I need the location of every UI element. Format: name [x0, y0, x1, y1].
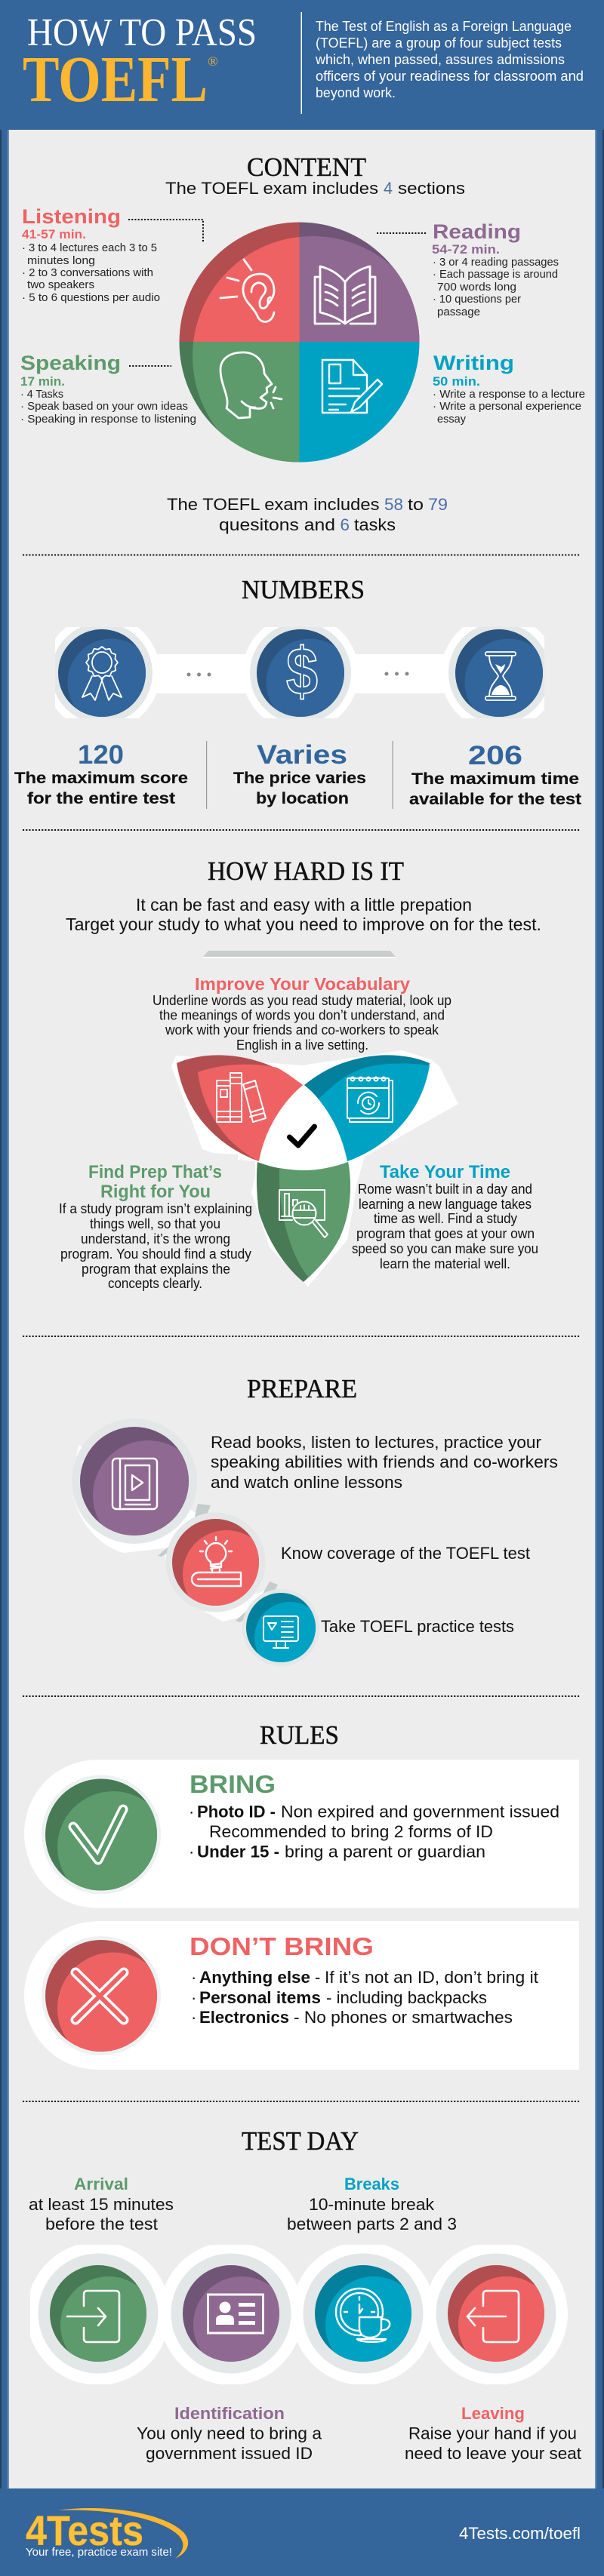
venn diagram — [171, 1050, 458, 1286]
text: breaks — [287, 2175, 457, 2233]
callout: reading: passage — [437, 306, 480, 318]
stat: varies: The price varies — [233, 770, 366, 787]
callout: listening: Listening — [22, 205, 121, 228]
callout: listening: 41-57 min. — [22, 227, 86, 241]
heading: prepare: PREPARE — [247, 1374, 357, 1403]
logo: 4Tests: 4Tests — [26, 2507, 143, 2554]
text: leaving — [405, 2404, 581, 2463]
header divider — [300, 12, 302, 114]
callout: speaking: 17 min. — [20, 374, 65, 389]
pie chart: four sections — [180, 222, 420, 462]
intro text: beyond work. — [316, 85, 396, 100]
callout: listening — [22, 205, 203, 304]
card: bring: BRING — [190, 1770, 276, 1798]
text: improve your vocabulary — [153, 974, 451, 1053]
text: improve your vocabulary: English in a live setting. — [236, 1037, 368, 1053]
icon: document with pencil — [322, 360, 382, 413]
text: find prep: Right for You — [100, 1182, 211, 1202]
text: know coverage: Know coverage of the TOEFL test — [281, 1544, 530, 1563]
text: improve your vocabulary: the meanings of words you don’t understand, and — [159, 1008, 445, 1023]
icon: monitor checklist — [246, 1593, 316, 1662]
text: identification: government issued ID — [146, 2444, 313, 2463]
icon: dollar — [257, 629, 344, 717]
heading: content: CONTENT — [247, 152, 366, 182]
panel: test day — [26, 2126, 581, 2463]
card: don't bring: · — [191, 1968, 196, 1987]
callout: reading — [377, 220, 559, 318]
text: breaks: 10-minute break — [309, 2195, 435, 2214]
text: read books: and watch online lessons — [211, 1473, 402, 1492]
venn: green leaf — [257, 1162, 350, 1282]
callout: speaking — [20, 352, 196, 426]
text: arrival: at least 15 minutes — [29, 2195, 174, 2214]
callout: writing: essay — [437, 413, 467, 426]
text: identification: You only need to bring a — [137, 2424, 322, 2443]
card: don't bring: Electronics — [199, 2008, 289, 2027]
card: don't bring: If it’s not an ID, don’t bring it — [325, 1968, 538, 1987]
text: take your time: learn the material well. — [380, 1256, 510, 1271]
intro lines: It can be fast and easy with a little prepation — [136, 895, 472, 915]
summary text: to — [408, 495, 424, 514]
intro text: officers of your readiness for classroom and — [316, 69, 584, 84]
icon: door leaving — [448, 2265, 544, 2362]
icon: id card — [183, 2265, 279, 2362]
text: breaks: between parts 2 and 3 — [287, 2215, 457, 2233]
venn: center check — [259, 1085, 347, 1170]
text: take your time — [352, 1162, 538, 1271]
text: arrival: before the test — [45, 2215, 158, 2233]
text: take your time: learning a new language takes — [359, 1197, 532, 1212]
callout: writing: · Write a response to a lecture — [433, 389, 585, 401]
subheading: sections: sections — [398, 179, 465, 198]
heading: how hard is it: HOW HARD IS IT — [208, 856, 404, 886]
stat: varies: by location — [256, 790, 349, 807]
stat: 206: 206 — [468, 741, 522, 770]
stat: 206 — [409, 741, 581, 808]
stat: 120: The maximum score — [14, 770, 188, 787]
callout: speaking: · Speak based on your own ideas — [20, 401, 188, 413]
card: bring: Recommended to bring 2 forms of ID — [209, 1822, 493, 1841]
text: practice tests: Take TOEFL practice tests — [321, 1617, 514, 1636]
callout: writing — [433, 352, 585, 426]
text: take your time: Rome wasn’t built in a day and — [358, 1182, 532, 1197]
card: don't bring: Anything else — [199, 1968, 310, 1987]
callout: speaking: Speaking — [20, 352, 121, 374]
card: bring: bring a parent or guardian — [285, 1843, 485, 1861]
stat: varies — [233, 740, 366, 807]
text: identification: Identification — [174, 2404, 285, 2423]
icon band — [55, 627, 544, 718]
text: take your time: time as well. Find a study — [374, 1211, 517, 1226]
connector dots — [187, 672, 409, 676]
icon: hourglass — [455, 629, 543, 717]
icon: bulb and book — [172, 1519, 259, 1606]
card: don't bring: Personal items — [199, 1988, 321, 2007]
summary text: quesitons and — [219, 515, 335, 534]
callout: writing: 50 min. — [433, 374, 480, 389]
summary text: 79 — [428, 495, 448, 514]
summary text: The TOEFL exam includes — [167, 495, 379, 514]
text: identification — [137, 2404, 322, 2463]
stat: varies: Varies — [257, 740, 347, 770]
text: improve your vocabulary: work with your friends and co-workers to speak — [165, 1022, 439, 1037]
venn: teal leaf — [304, 1055, 430, 1161]
callout: reading: 54-72 min. — [432, 242, 500, 257]
text: read books: speaking abilities with friends and co-workers — [211, 1452, 558, 1471]
stat: 120: for the entire test — [27, 790, 175, 807]
icon: clock and coffee — [315, 2265, 411, 2362]
text: find prep: program that explains the — [82, 1262, 230, 1277]
text: find prep: understand, it’s the wrong — [81, 1231, 230, 1247]
intro text — [315, 19, 584, 100]
intro text: The Test of English as a Foreign Language — [316, 19, 572, 34]
panel: rules — [24, 1720, 579, 2070]
subheading: sections — [165, 179, 465, 198]
stat: 120: 120 — [78, 740, 124, 770]
callout: writing: Writing — [433, 352, 514, 374]
panel: how hard is it — [59, 856, 541, 1291]
text: leaving: Raise your hand if you — [408, 2424, 577, 2443]
text: breaks: Breaks — [344, 2175, 399, 2193]
text: leaving: need to leave your seat — [405, 2444, 581, 2463]
footer url: 4Tests.com/toefl — [459, 2524, 581, 2543]
icon: video book — [80, 1427, 189, 1535]
text: find prep — [59, 1162, 252, 1291]
text: find prep: program. You should find a study — [60, 1247, 251, 1262]
card: bring: Photo ID - — [197, 1802, 276, 1821]
callout: reading: 700 words long — [437, 281, 516, 294]
summary text: tasks — [354, 515, 396, 534]
icon: award — [58, 629, 146, 717]
icon: ear — [220, 260, 274, 321]
callout: speaking: · Speaking in response to listening — [20, 413, 196, 426]
footer — [0, 2488, 604, 2576]
text: take your time: speed so you can make sure you — [352, 1241, 538, 1256]
intro lines — [66, 895, 541, 934]
callout: listening: minutes long — [27, 255, 95, 267]
registered mark: ® — [208, 54, 218, 69]
callout: writing: · Write a personal experience — [433, 401, 581, 413]
text: read books — [211, 1433, 558, 1492]
text: read books: Read books, listen to lectures, practice your — [211, 1433, 541, 1452]
callout: reading: Reading — [433, 220, 521, 243]
icon band — [26, 2242, 568, 2385]
text: find prep: Find Prep That’s — [88, 1162, 222, 1182]
subheading: sections: 4 — [384, 179, 393, 198]
heading: numbers: NUMBERS — [242, 575, 365, 604]
callout: reading: · 3 or 4 reading passages — [433, 257, 559, 269]
card: bring: · — [189, 1802, 194, 1821]
intro text: which, when passed, assures admissions — [315, 52, 565, 67]
text: arrival — [29, 2175, 174, 2233]
stat: 206: available for the test — [409, 791, 581, 808]
stat: 120 — [14, 740, 188, 807]
card: don't bring: · — [191, 1988, 196, 2007]
header — [23, 11, 584, 115]
card: don't bring: DON’T BRING — [190, 1932, 374, 1960]
icon: check circle — [42, 1775, 161, 1894]
card: don't bring: - — [315, 1968, 320, 1987]
prepare backdrop swirl — [72, 1419, 319, 1666]
icon: x circle — [42, 1936, 161, 2055]
text: take your time: Take Your Time — [380, 1162, 510, 1182]
card: don't bring — [24, 1921, 579, 2070]
text: find prep: concepts clearly. — [108, 1276, 202, 1291]
summary text: 58 — [384, 495, 403, 514]
icon: door entering — [50, 2265, 146, 2362]
subheading: sections: The TOEFL exam includes — [165, 179, 378, 198]
text: take your time: program that goes at your own — [356, 1226, 535, 1241]
icon: open book — [315, 266, 375, 324]
card: bring — [24, 1760, 579, 1908]
icon: dollar: $ — [286, 634, 318, 709]
summary text — [167, 495, 448, 534]
callout: listening: two speakers — [27, 279, 94, 291]
title: TOEFL: TOEFL — [23, 42, 208, 115]
panel: prepare — [72, 1374, 558, 1673]
venn: red leaf — [177, 1055, 303, 1161]
callout: speaking: · 4 Tasks — [20, 389, 63, 401]
icon: speaking head — [220, 352, 282, 418]
heading: rules: RULES — [260, 1720, 339, 1750]
card: bring: · — [189, 1843, 194, 1861]
panel: content — [20, 152, 585, 534]
text: find prep: things well, so that you — [90, 1216, 220, 1231]
summary text: 6 — [340, 515, 350, 534]
card: bring: Under 15 - — [197, 1843, 279, 1861]
intro text: (TOEFL) are a group of four subject tests — [316, 35, 562, 51]
stat: 206: The maximum time — [411, 770, 579, 788]
title: how to pass: HOW TO PASS — [27, 11, 257, 54]
callout: listening: · 3 to 4 lectures each 3 to 5 — [22, 242, 157, 254]
text: improve your vocabulary: Underline words as you read study material, look up — [153, 993, 451, 1008]
intro lines: Target your study to what you need to improve on for the test. — [66, 915, 541, 934]
text: find prep: If a study program isn’t explaining — [59, 1201, 252, 1216]
text: leaving: Leaving — [461, 2404, 525, 2423]
card: don't bring: - No phones or smartwaches — [294, 2008, 513, 2027]
text: improve your vocabulary: Improve Your Vocabulary — [195, 974, 410, 994]
callout: reading: · 10 questions per — [433, 294, 521, 306]
text: arrival: Arrival — [74, 2175, 128, 2193]
callout: listening: · 5 to 6 questions per audio — [22, 292, 160, 304]
heading: test day: TEST DAY — [242, 2126, 359, 2156]
callout: reading: · Each passage is around — [433, 269, 558, 281]
card: don't bring: · — [191, 2008, 196, 2027]
logo: 4Tests: Your free, practice exam site! — [26, 2546, 172, 2559]
card: bring: Non expired and government issued — [281, 1802, 559, 1821]
callout: listening: · 2 to 3 conversations with — [22, 267, 153, 279]
card: don't bring: - including backpacks — [326, 1988, 487, 2007]
panel: numbers — [14, 575, 581, 809]
